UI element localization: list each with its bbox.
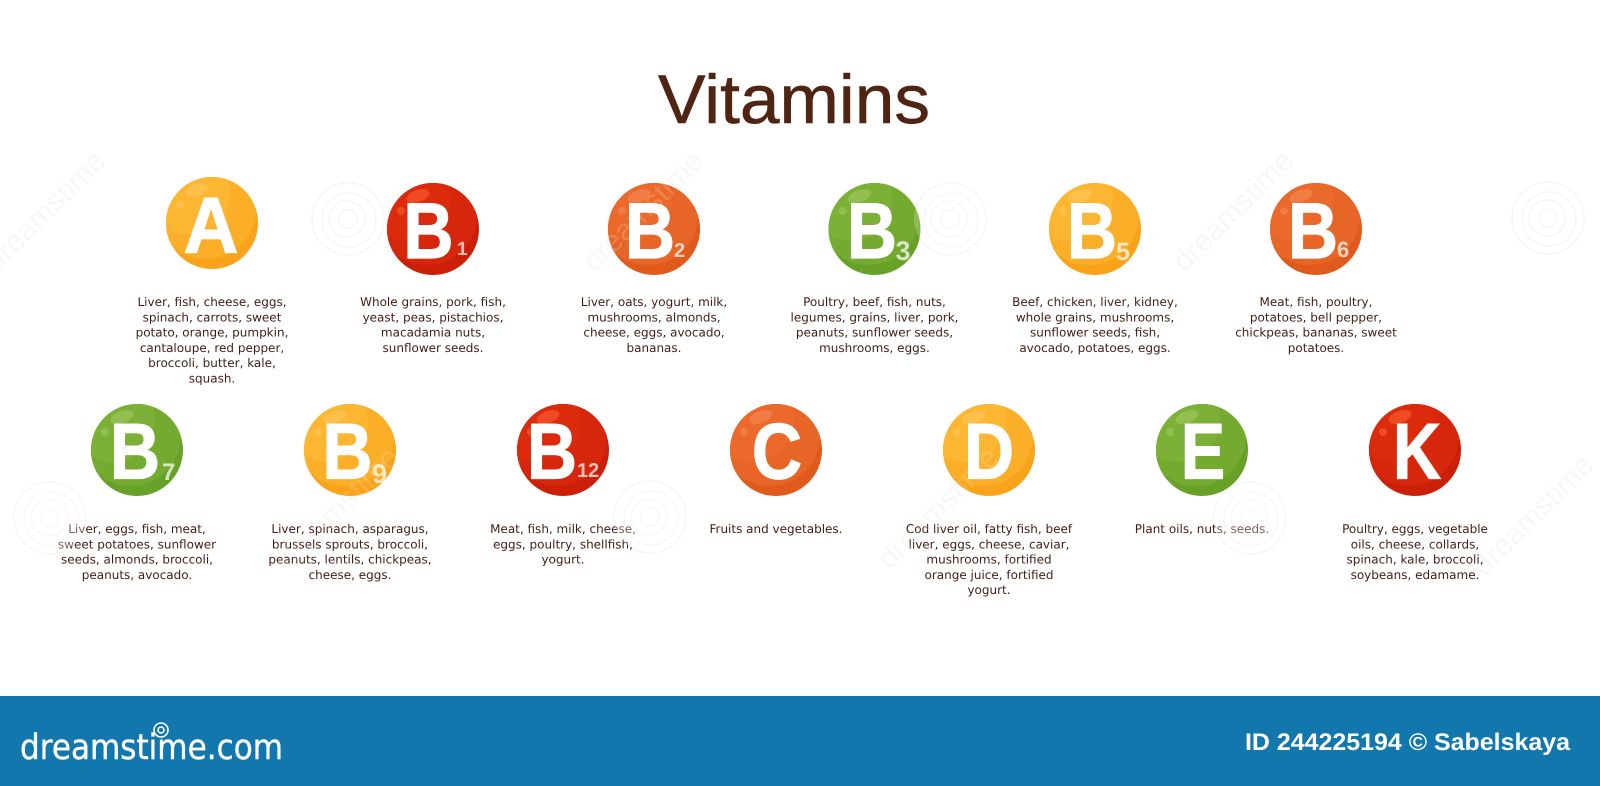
badge C <box>710 378 822 496</box>
sources B7: peanuts, avocado. <box>82 568 192 582</box>
sources K: soybeans, edamame. <box>1351 568 1479 582</box>
vitamin B2 <box>581 157 727 355</box>
badge B7: B <box>110 406 160 496</box>
sources D: mushrooms, fortified <box>926 553 1052 567</box>
sources B2: mushrooms, almonds, <box>587 310 721 324</box>
badge B5: B <box>1067 186 1117 275</box>
badge B7 <box>71 378 183 496</box>
badge E <box>1136 378 1248 496</box>
icon: logo spiral <box>154 723 168 737</box>
sources E: Plant oils, nuts, seeds. <box>1135 522 1269 536</box>
sources C: Fruits and vegetables. <box>709 522 843 536</box>
sources D: Cod liver oil, fatty fish, beef <box>906 522 1073 536</box>
sources B7: sweet potatoes, sunflower <box>58 537 216 551</box>
sources B6: potatoes, bell pepper, <box>1250 310 1382 324</box>
badge B5: 5 <box>1116 238 1130 266</box>
badge B7: 7 <box>162 459 175 486</box>
sources B7: seeds, almonds, broccoli, <box>61 553 213 567</box>
vitamin B9 <box>268 378 432 582</box>
watermark overlay: dreamstime <box>271 441 405 575</box>
badge C: C <box>752 406 802 496</box>
vitamin E <box>1135 378 1269 536</box>
sources B5: avocado, potatoes, eggs. <box>1019 341 1171 355</box>
sources B1: Whole grains, pork, fish, <box>360 295 506 309</box>
badge K: K <box>1393 406 1441 496</box>
watermark overlay: dreamstime <box>576 144 710 278</box>
sources D: orange juice, fortified <box>924 568 1054 582</box>
footer credit: ID 244225194 © Sabelskaya <box>1245 729 1571 756</box>
badge B9: 9 <box>372 459 387 489</box>
sources B12: Meat, fish, milk, cheese, <box>490 522 636 536</box>
badge B5 <box>1029 157 1141 275</box>
badge B9: B <box>322 406 373 496</box>
sources A: broccoli, butter, kale, <box>148 356 276 370</box>
vitamin C <box>709 378 843 536</box>
sources B7: Liver, eggs, fish, meat, <box>68 522 206 536</box>
badge D: D <box>964 406 1014 496</box>
sources B5: whole grains, mushrooms, <box>1016 310 1174 324</box>
sources B7 <box>58 522 216 582</box>
sources B6 <box>1235 295 1397 355</box>
sources B9: peanuts, lentils, chickpeas, <box>268 553 432 567</box>
sources A: cantaloupe, red pepper, <box>140 341 284 355</box>
sources B6: chickpeas, bananas, sweet <box>1235 326 1397 340</box>
sources B1 <box>360 295 506 355</box>
sources K: oils, cheese, collards, <box>1351 537 1479 551</box>
sources B9: Liver, spinach, asparagus, <box>271 522 429 536</box>
sources B2: Liver, oats, yogurt, milk, <box>581 295 727 309</box>
vitamin B12 <box>490 378 636 567</box>
badge B1: 1 <box>457 239 468 260</box>
sources B5 <box>1012 295 1178 355</box>
sources A <box>136 295 288 386</box>
vitamin K <box>1342 378 1488 582</box>
sources B2: cheese, eggs, avocado, <box>583 326 725 340</box>
badge K <box>1349 378 1461 496</box>
sources B3: mushrooms, eggs. <box>819 341 930 355</box>
watermark overlay <box>14 144 1286 575</box>
badge B2: B <box>625 186 675 275</box>
vitamin B5 <box>1012 157 1178 355</box>
badge B6: B <box>1288 186 1338 275</box>
watermark spirals and text: dreamstime <box>576 144 710 278</box>
badge B9 <box>284 378 396 496</box>
badge B3 <box>808 157 920 275</box>
sources K <box>1342 522 1488 582</box>
sources B9 <box>268 522 432 582</box>
footer logo: dreamstime.com <box>20 728 283 768</box>
watermark spirals and text: dreamstime <box>271 441 405 575</box>
sources D <box>906 522 1073 597</box>
footer bar <box>0 696 1600 786</box>
vitamin A <box>136 151 288 386</box>
sources A: spinach, carrots, sweet <box>143 310 282 324</box>
sources B1: yeast, peas, pistachios, <box>363 310 503 324</box>
sources A: squash. <box>189 372 235 386</box>
vitamin D <box>906 378 1073 597</box>
watermark overlay: dreamstime <box>871 441 1005 575</box>
badge D <box>923 378 1035 496</box>
sources B2: bananas. <box>627 341 681 355</box>
sources B3 <box>790 295 958 355</box>
vitamin B7 <box>58 378 216 582</box>
badge B3: 3 <box>896 236 911 266</box>
watermark spirals and text: dreamstime <box>1466 448 1600 582</box>
title: Vitamins <box>658 61 930 138</box>
badge E: E <box>1181 406 1225 496</box>
badge A <box>146 151 258 270</box>
sources D: liver, eggs, cheese, caviar, <box>909 537 1069 551</box>
sources B3: Poultry, beef, fish, nuts, <box>803 295 946 309</box>
sources B3: legumes, grains, liver, pork, <box>790 310 958 324</box>
sources B12: eggs, poultry, shellfish, <box>493 537 633 551</box>
badge B3: B <box>847 186 897 275</box>
sources B1: sunflower seeds. <box>382 341 484 355</box>
watermark spirals and text: dreamstime <box>1166 144 1300 278</box>
badge B12: B <box>527 406 577 496</box>
sources A: potato, orange, pumpkin, <box>136 326 288 340</box>
sources B3: peanuts, sunflower seeds, <box>796 326 953 340</box>
sources B12: yogurt. <box>541 553 585 567</box>
badge B6: 6 <box>1337 237 1349 262</box>
sources B9: brussels sprouts, broccoli, <box>272 537 428 551</box>
sources B2 <box>581 295 727 355</box>
badge B12 <box>497 378 609 496</box>
sources K: Poultry, eggs, vegetable <box>1342 522 1488 536</box>
sources D: yogurt. <box>967 583 1011 597</box>
sources B5: sunflower seeds, fish, <box>1030 326 1160 340</box>
sources K: spinach, kale, broccoli, <box>1346 553 1484 567</box>
badge B1 <box>367 157 479 275</box>
sources B5: Beef, chicken, liver, kidney, <box>1012 295 1178 309</box>
vitamin B3 <box>790 157 958 355</box>
badge B2 <box>588 157 700 275</box>
sources B6: Meat, fish, poultry, <box>1260 295 1372 309</box>
sources B9: cheese, eggs. <box>309 568 391 582</box>
sources B12 <box>490 522 636 567</box>
badge A: A <box>184 180 238 270</box>
watermark spirals and text <box>0 144 1600 582</box>
vitamin B1 <box>360 157 506 355</box>
badge B6 <box>1250 157 1362 275</box>
sources A: Liver, fish, cheese, eggs, <box>137 295 287 309</box>
vitamin B6 <box>1235 157 1397 355</box>
sources B1: macadamia nuts, <box>381 326 485 340</box>
badge B2: 2 <box>674 240 685 262</box>
watermark spirals and text: dreamstime <box>871 441 1005 575</box>
badge B12: 12 <box>577 460 599 482</box>
sources B6: potatoes. <box>1288 341 1344 355</box>
badge B1: B <box>403 186 454 275</box>
